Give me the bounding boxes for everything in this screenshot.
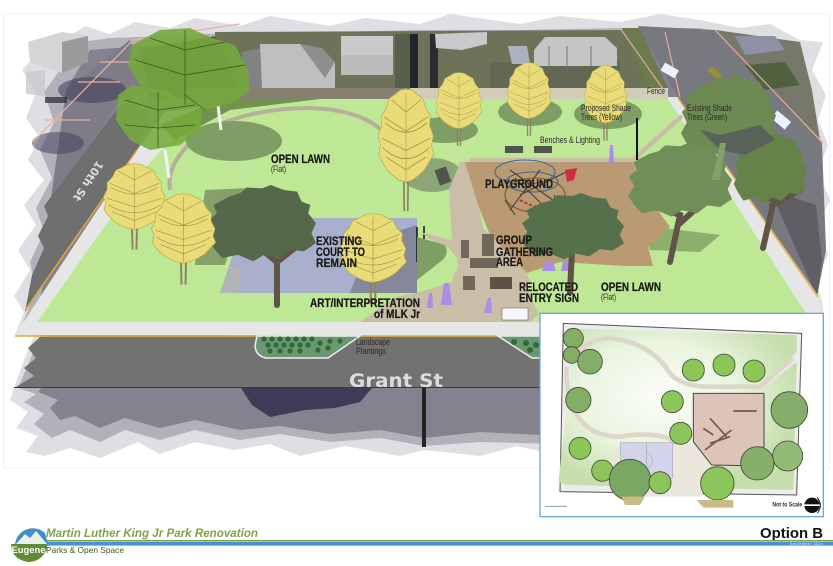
footer rule	[40, 540, 833, 546]
label: group gathering area: GATHERING	[496, 247, 553, 259]
right side aerial street	[620, 26, 826, 297]
label: relocated entry sign: ENTRY SIGN	[519, 293, 579, 305]
inset: scale bar	[545, 505, 567, 508]
curved lawn path	[169, 108, 390, 190]
label: open lawn flat, right: (Flat)	[601, 292, 616, 302]
label: existing shade trees: Existing Shade	[687, 103, 732, 113]
label: open lawn flat, right	[601, 282, 661, 302]
plaza and main path	[360, 162, 540, 322]
option label: Option B	[760, 525, 823, 542]
upper right path	[470, 116, 682, 160]
lower right lawn patch	[527, 268, 680, 322]
label: benches and lighting: Benches & Lighting	[540, 135, 600, 145]
Grant St road	[16, 337, 540, 387]
inset: play equipment	[703, 411, 757, 450]
label: art and interpretation: of MLK Jr	[374, 309, 420, 321]
property lines, left	[33, 24, 240, 142]
date: September 2021	[790, 542, 823, 546]
footer title: Martin Luther King Jr Park Renovation	[46, 528, 258, 540]
inset: playground	[693, 393, 764, 466]
label: existing shade trees: Trees (Green)	[687, 112, 727, 122]
label: existing court to remain: REMAIN	[316, 258, 357, 270]
label: landscape plantings: Plantings	[356, 346, 386, 356]
Eugene logo: Eugene	[12, 545, 46, 556]
label: proposed shade trees: Proposed Shade	[581, 103, 631, 113]
label: relocated entry sign: RELOCATED	[519, 282, 578, 294]
top neighbourhood yards	[215, 30, 668, 100]
left street	[25, 95, 150, 312]
fence	[160, 88, 668, 140]
label: relocated entry sign	[519, 282, 579, 305]
label: fence: Fence	[647, 86, 665, 96]
department: Parks & Open Space	[46, 545, 124, 555]
planter left	[255, 336, 360, 358]
playground surface	[465, 162, 670, 273]
white birch trunks	[165, 105, 221, 178]
label: playground: PLAYGROUND	[485, 179, 553, 191]
planter right	[498, 336, 545, 358]
inset: lawn	[558, 328, 797, 490]
shaded tree underside and trunk	[700, 125, 775, 180]
label: existing court to remain	[316, 236, 365, 270]
aerial shadow on Grant St side	[14, 387, 540, 447]
Eugene logo	[11, 528, 48, 562]
aerial photo context: main	[38, 34, 808, 438]
street name: 10th St: 10th St	[70, 158, 106, 203]
existing dark shade tree trunks	[250, 190, 800, 305]
curb line	[15, 98, 818, 336]
label: art and interpretation	[310, 298, 420, 321]
label: existing court to remain: COURT TO	[316, 247, 365, 259]
proposed yellow shade trees	[103, 63, 627, 304]
left side aerial with tree shadows	[32, 40, 150, 205]
label: landscape plantings	[356, 337, 390, 356]
label: open lawn flat: OPEN LAWN	[271, 154, 330, 166]
label: open lawn flat	[271, 154, 330, 174]
inset: court	[621, 443, 673, 478]
street name: Grant St: Grant St	[349, 370, 443, 392]
label: group gathering area	[496, 235, 553, 269]
park lawn	[37, 99, 805, 322]
thin frame	[4, 14, 830, 468]
label: group gathering area: GROUP	[496, 235, 532, 247]
sidewalk surround	[15, 96, 824, 336]
play structure	[495, 160, 577, 225]
inset site plan	[540, 313, 823, 517]
inset: planters	[622, 497, 733, 508]
label: proposed shade trees	[581, 103, 631, 122]
aerial photo context: feathered outer edge	[10, 14, 830, 458]
aerial photo context: mid feather	[18, 28, 816, 446]
label: proposed shade trees: Trees (Yellow)	[581, 112, 622, 122]
benches	[435, 146, 552, 186]
basketball court	[220, 218, 424, 293]
green overlay shade trees, top left	[116, 28, 250, 150]
houses	[26, 32, 617, 96]
yard details	[140, 28, 668, 100]
inset: curved path	[566, 338, 793, 478]
label: landscape plantings: Landscape	[356, 337, 390, 347]
label: open lawn flat: (Flat)	[271, 164, 286, 174]
label: existing shade trees	[687, 103, 732, 122]
inset: shade trees	[563, 328, 808, 501]
inset: north arrow	[804, 498, 820, 513]
inset: not to scale: Not to Scale	[772, 502, 803, 509]
label: existing court to remain: EXISTING	[316, 236, 362, 248]
label: open lawn flat, right: OPEN LAWN	[601, 282, 661, 294]
existing dark shade trees	[208, 75, 806, 261]
relocated entry sign	[502, 308, 528, 320]
lamp post	[636, 118, 638, 160]
gathering people and tables	[461, 234, 512, 290]
label: art and interpretation: ART/INTERPRETATION	[310, 298, 420, 310]
purple art pieces	[427, 145, 614, 313]
lawn shadows	[186, 98, 720, 265]
lawn island	[417, 237, 458, 291]
inset: plaza	[610, 442, 712, 497]
label: group gathering area: AREA	[496, 257, 523, 269]
inset: site boundary	[560, 323, 802, 495]
